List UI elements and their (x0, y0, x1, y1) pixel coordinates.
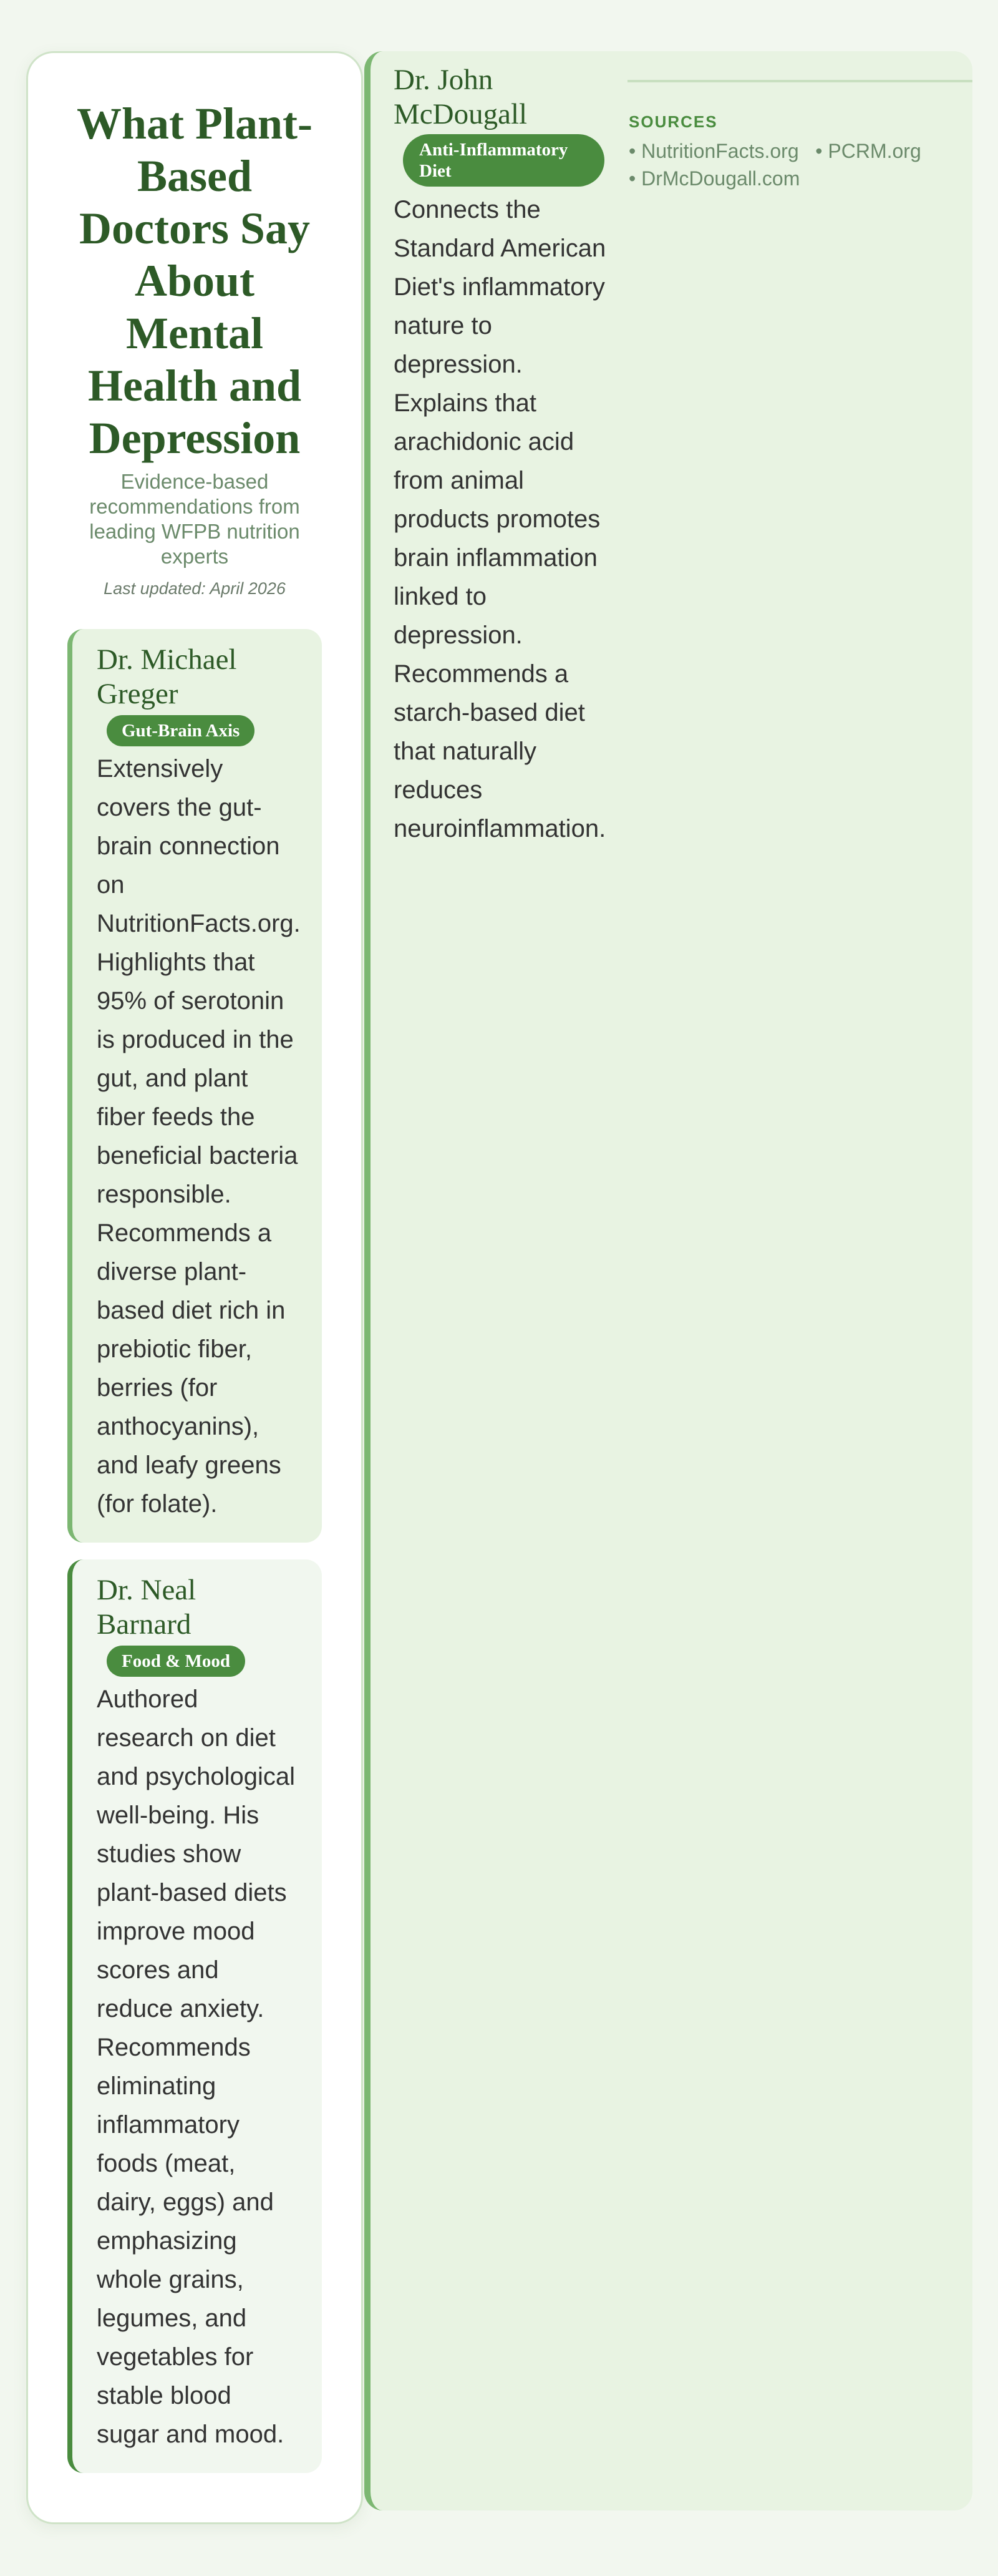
description: Authored (97, 1686, 198, 1713)
description: is produced in the (97, 1026, 294, 1053)
name: Greger (97, 678, 178, 710)
description: fiber feeds the (97, 1103, 254, 1131)
badge: Food & Mood (122, 1651, 230, 1671)
description: brain inflammation (394, 544, 598, 572)
description: reduce anxiety. (97, 1995, 264, 2022)
title: About (135, 256, 254, 306)
subtitle: Evidence-based (121, 470, 268, 493)
badge: Gut-Brain Axis (122, 721, 240, 741)
card: Dr. Michael Greger (67, 629, 322, 1543)
description: prebiotic fiber, (97, 1335, 252, 1363)
description: Connects the (394, 196, 541, 223)
description: depression. (394, 351, 523, 378)
description: Recommends (97, 2034, 251, 2061)
subtitle: experts (161, 545, 228, 568)
name: Dr. Michael (97, 643, 237, 676)
name: McDougall (394, 98, 527, 130)
description (97, 1686, 295, 2448)
name (394, 64, 527, 130)
description: beneficial bacteria (97, 1142, 298, 1169)
description: that naturally (394, 738, 536, 765)
description: from animal (394, 467, 524, 494)
badge (403, 134, 604, 187)
description: starch-based diet (394, 699, 585, 726)
description: responsible. (97, 1181, 231, 1208)
description: Standard American (394, 235, 606, 262)
badge: Anti-Inflammatory (419, 140, 568, 160)
sources box (627, 80, 977, 2514)
sources list: • DrMcDougall.com (629, 167, 800, 190)
title: Based (137, 151, 252, 201)
badge (107, 1646, 245, 1677)
title: What Plant- (77, 99, 312, 149)
description: berries (for (97, 1374, 217, 1402)
name: Dr. Neal (97, 1574, 196, 1606)
title: Doctors Say (79, 203, 310, 253)
sources list: • NutritionFacts.org • PCRM.org (629, 140, 921, 162)
subtitle: recommendations from (89, 495, 300, 518)
last updated: Last updated: April 2026 (104, 579, 286, 598)
description: emphasizing (97, 2227, 237, 2255)
description: well-being. His (97, 1802, 259, 1829)
description: neuroinflammation. (394, 815, 606, 842)
description: linked to (394, 583, 487, 610)
card: Dr. John McDougall (394, 64, 606, 842)
title: Depression (89, 413, 300, 463)
description: anthocyanins), (97, 1413, 259, 1440)
description: foods (meat, (97, 2150, 235, 2177)
description: dairy, eggs) and (97, 2188, 274, 2216)
description: Recommends a (394, 660, 568, 688)
description: Diet's inflammatory (394, 273, 605, 301)
description: improve mood (97, 1918, 254, 1945)
description: depression. (394, 622, 523, 649)
description: on (97, 871, 125, 899)
description: 95% of serotonin (97, 987, 284, 1015)
subtitle: leading WFPB nutrition (89, 520, 300, 543)
name: Barnard (97, 1608, 191, 1641)
description: covers the gut- (97, 794, 262, 821)
description: (for folate). (97, 1490, 217, 1518)
sources list (629, 140, 921, 190)
description: products promotes (394, 505, 600, 533)
description: scores and (97, 1956, 219, 1984)
description (394, 196, 606, 842)
description: based diet rich in (97, 1297, 285, 1324)
description: stable blood (97, 2382, 231, 2409)
description: reduces (394, 776, 482, 804)
description: vegetables for (97, 2343, 253, 2371)
title: Health and (88, 361, 301, 411)
description: plant-based diets (97, 1879, 287, 1906)
description: and leafy greens (97, 1451, 281, 1479)
description: arachidonic acid (394, 428, 574, 456)
description: research on diet (97, 1724, 276, 1752)
name (97, 643, 237, 710)
description: diverse plant- (97, 1258, 246, 1286)
description (97, 755, 301, 1518)
description: Recommends a (97, 1219, 271, 1247)
panel: McDougall and sources (364, 51, 972, 2510)
name: Dr. John (394, 64, 493, 96)
description: NutritionFacts.org. (97, 910, 301, 937)
badge (107, 715, 254, 746)
description: Extensively (97, 755, 223, 783)
description: gut, and plant (97, 1065, 248, 1092)
description: studies show (97, 1840, 241, 1868)
sources heading: SOURCES (629, 112, 718, 131)
title (77, 99, 312, 463)
description: nature to (394, 312, 492, 339)
name (97, 1574, 196, 1641)
description: whole grains, (97, 2266, 244, 2293)
subtitle (89, 470, 300, 568)
badge: Diet (419, 161, 452, 181)
card: Dr. Neal Barnard (67, 1559, 322, 2473)
description: brain connection (97, 832, 280, 860)
title: Mental (126, 308, 263, 358)
description: eliminating (97, 2072, 216, 2100)
description: Highlights that (97, 949, 254, 976)
description: Explains that (394, 389, 536, 417)
description: and psychological (97, 1763, 295, 1790)
description: legumes, and (97, 2305, 246, 2332)
panel: intro and doctor cards (26, 51, 363, 2524)
description: inflammatory (97, 2111, 240, 2139)
description: sugar and mood. (97, 2421, 284, 2448)
